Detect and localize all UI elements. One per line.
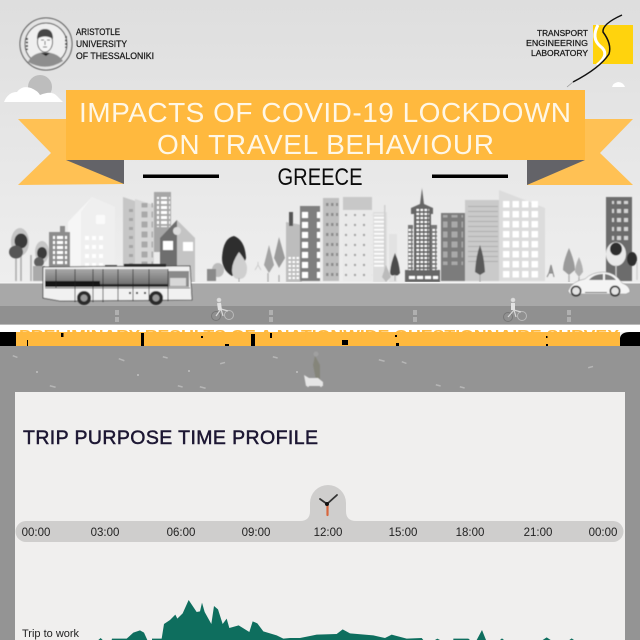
university name: ARISTOTLE xyxy=(76,27,120,37)
timeline bar: 18:00 xyxy=(456,527,484,539)
title ribbon xyxy=(18,90,633,185)
timeline bar: 00:00 xyxy=(22,527,50,539)
left low building xyxy=(49,226,70,281)
timeline bar: 21:00 xyxy=(524,527,552,539)
left ribbon tail xyxy=(18,119,124,185)
laboratory name: ENGINEERING xyxy=(526,39,588,48)
dark right building xyxy=(606,197,637,281)
university name xyxy=(76,27,154,61)
title text xyxy=(79,97,571,160)
pale background building xyxy=(68,197,115,282)
icon: person walking dog xyxy=(304,352,323,387)
tall grey buildings xyxy=(123,192,171,282)
dark skyscraper xyxy=(405,188,440,282)
logo: Aristotle University of Thessaloniki xyxy=(20,18,154,70)
timeline bar xyxy=(16,485,624,542)
panel background xyxy=(15,392,625,640)
title text: IMPACTS OF COVID-19 LOCKDOWN xyxy=(79,97,571,128)
icon: bus xyxy=(43,264,192,305)
panel heading: TRIP PURPOSE TIME PROFILE xyxy=(23,427,318,449)
cityscape xyxy=(9,188,637,283)
timeline bar: 15:00 xyxy=(389,527,417,539)
title text: ON TRAVEL BEHAVIOUR xyxy=(157,129,494,160)
right grey building xyxy=(441,213,465,281)
subtitle band: PRELIMINARY RESULTS OF A NATIONWIDE QUESTIONNAIRE SURVEY xyxy=(19,327,619,344)
grey ground xyxy=(0,346,640,640)
left ribbon fold xyxy=(66,160,124,184)
trees left xyxy=(9,228,49,281)
timeline bar: 03:00 xyxy=(91,527,119,539)
panel: trip purpose time profile xyxy=(15,392,625,640)
trees centre-left xyxy=(207,236,285,282)
title banner xyxy=(66,90,585,160)
subtitle: Greece: GREECE xyxy=(278,164,362,191)
pale tower xyxy=(373,205,400,282)
right pale buildings xyxy=(465,190,545,282)
university name: UNIVERSITY xyxy=(76,39,127,49)
icon: university seal xyxy=(20,18,72,70)
laboratory name: LABORATORY xyxy=(531,49,589,58)
trees right xyxy=(547,248,583,283)
timeline bar: 09:00 xyxy=(242,527,270,539)
timeline bar: 00:00 xyxy=(589,527,617,539)
university name: OF THESSALONIKI xyxy=(76,51,154,61)
laboratory name xyxy=(526,29,589,58)
laboratory name: TRANSPORT xyxy=(537,29,588,38)
road xyxy=(0,282,640,325)
icon: yellow square with S curve xyxy=(567,15,633,87)
icon: cyclist right xyxy=(504,298,526,322)
icon: sun and cloud xyxy=(4,75,63,102)
icon: small cloud xyxy=(612,82,625,87)
timeline bar: 12:00 xyxy=(314,527,342,539)
right ribbon fold xyxy=(527,160,585,185)
icon: cyclist left xyxy=(212,298,234,320)
right ribbon tail xyxy=(527,119,633,185)
area chart: trip to work xyxy=(98,600,574,640)
timeline bar: 06:00 xyxy=(167,527,195,539)
icon: car xyxy=(568,272,630,296)
subtitle band xyxy=(0,325,640,346)
logo: Transport Engineering Laboratory xyxy=(526,15,633,87)
buildings centre xyxy=(286,197,372,282)
house xyxy=(160,220,195,282)
chart row label: Trip to work xyxy=(22,628,80,640)
icon: clock hands xyxy=(320,495,337,515)
subtitle: Greece xyxy=(143,164,508,191)
